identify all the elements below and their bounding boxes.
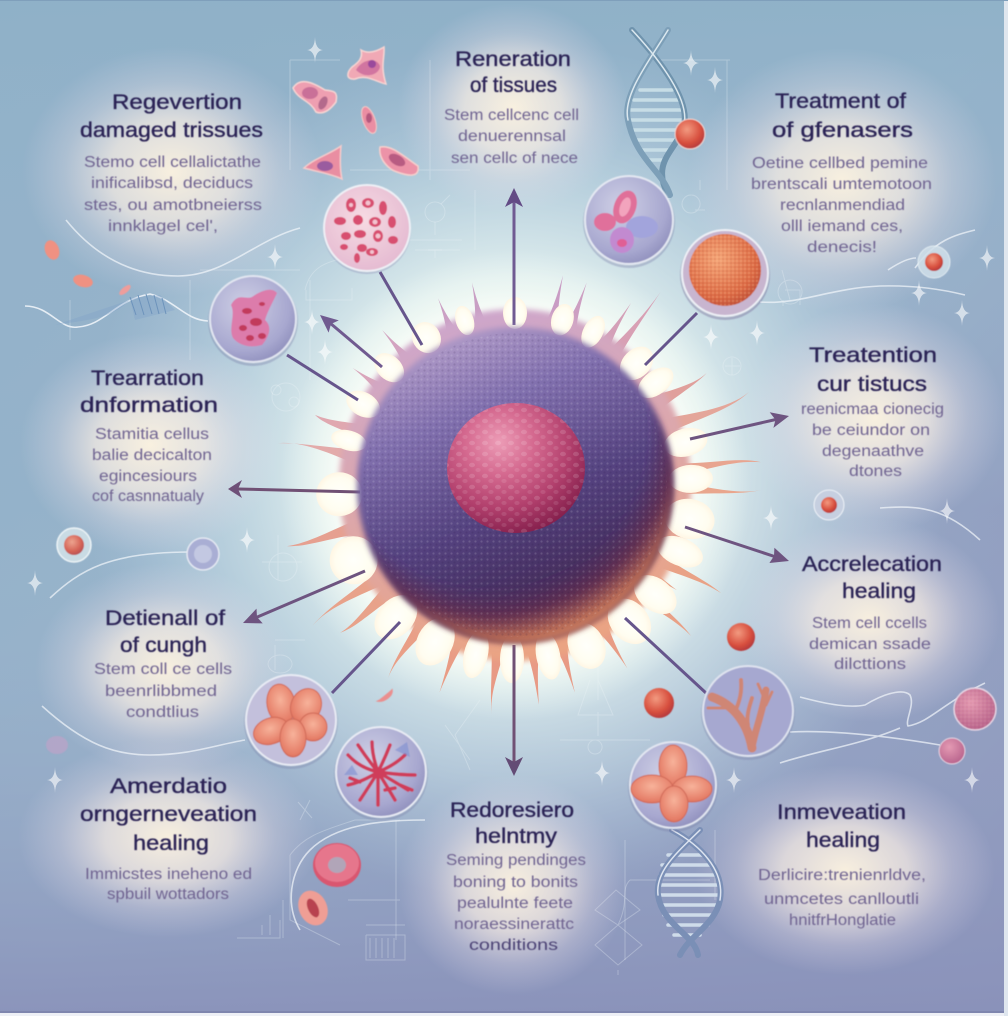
body <box>84 154 262 235</box>
text block: Amerdatio orngerneveation healing <box>80 775 257 903</box>
body <box>758 867 926 929</box>
heading <box>105 607 225 657</box>
body: cof casnnatualy <box>92 488 204 505</box>
connecting thin curves <box>42 220 985 930</box>
heading <box>772 90 913 142</box>
body <box>751 155 932 256</box>
arrow: right upper <box>690 412 789 439</box>
body <box>94 661 232 721</box>
body <box>92 426 212 505</box>
body: Stem cell ccells <box>812 615 927 632</box>
text block: Treatention cur tistucs <box>801 344 944 480</box>
body: egincesiours <box>99 468 197 485</box>
heading: Accrelecation <box>802 553 942 576</box>
arrow: up to tissue regeneration <box>505 188 523 325</box>
small blood cells, left <box>42 238 132 297</box>
heading: Treatention <box>809 344 937 367</box>
body: sen cellc of nece <box>451 150 578 167</box>
bubble: coral branching tissue <box>701 666 795 760</box>
connector lines to bubbles <box>287 272 706 693</box>
arrow: left <box>228 480 360 498</box>
arrow: down <box>505 645 523 776</box>
body: beenrlibbmed <box>105 683 217 700</box>
body: Seming pendinges <box>446 852 586 869</box>
bubble: red filaments <box>334 727 428 821</box>
bubble: four petals <box>628 742 718 832</box>
nucleus <box>447 403 585 533</box>
text block: Accrelecation healing <box>802 553 942 673</box>
body: denecis! <box>807 239 877 256</box>
small DNA strand at left <box>25 294 208 327</box>
small cell bubbles <box>46 119 996 764</box>
heading: healing <box>842 580 916 603</box>
halo petals <box>315 297 718 683</box>
body: denuerennsal <box>458 128 566 145</box>
arrow: upper left <box>320 315 382 367</box>
cell spikes <box>276 273 764 716</box>
body: dtones <box>849 463 902 480</box>
body: reenicmaa cionecig <box>801 401 944 418</box>
body <box>446 852 586 954</box>
body <box>444 107 579 167</box>
heading: of gfenasers <box>772 119 913 142</box>
body: hnitfrHonglatie <box>789 912 896 929</box>
body: degenaathve <box>822 443 924 460</box>
heading <box>80 367 218 417</box>
heading <box>809 344 937 396</box>
body: recnlanmendiad <box>780 197 905 214</box>
arrow: lower left <box>243 571 365 623</box>
body: spbuil wottadors <box>107 886 229 903</box>
body: innklagel cel', <box>108 218 218 235</box>
text block: Inmeveation healing <box>758 801 926 929</box>
heading <box>80 91 263 142</box>
heading <box>450 799 574 848</box>
heading: Reneration <box>455 48 571 71</box>
body: brentscali umtemotoon <box>751 176 932 193</box>
body: Immicstes ineheno ed <box>85 866 252 883</box>
body: Stemo cell cellalictathe <box>84 154 261 171</box>
heading: cur tistucs <box>817 373 927 396</box>
bubble: purple with lobed cells <box>583 176 675 268</box>
heading: helntmy <box>475 825 558 848</box>
body: Stem cellcenc cell <box>444 107 579 124</box>
blood cells bottom left <box>293 843 361 930</box>
DNA helix bottom <box>658 830 721 955</box>
text block: Redoresiero helntmy <box>446 799 586 954</box>
heading: Detienall of <box>105 607 225 630</box>
body: balie decicalton <box>92 447 212 464</box>
heading: orngerneveation <box>80 803 257 826</box>
body: Stem coll ce cells <box>94 661 232 678</box>
heading: Treatment of <box>775 90 906 113</box>
heading: of cungh <box>120 634 207 657</box>
heading: healing <box>133 832 209 855</box>
heading <box>802 553 942 603</box>
body <box>809 615 931 673</box>
heading <box>455 48 571 97</box>
bubble: purple with pink blob <box>208 276 298 366</box>
DNA helix top <box>627 30 685 195</box>
body: condtlius <box>126 704 199 721</box>
body: be ceiundor on <box>812 422 930 439</box>
heading: Amerdatio <box>110 775 227 798</box>
body: noraessinerattc <box>454 916 574 933</box>
text block: Reneration of tissues <box>444 48 579 167</box>
flare ring behind the petals <box>339 309 691 661</box>
heading: Trearration <box>91 367 204 390</box>
body: pealulnte feete <box>457 895 573 912</box>
heading <box>777 801 906 852</box>
text block: Trearration dnformation <box>80 367 218 505</box>
arrow: right lower <box>685 527 789 563</box>
text block: Regevertion damaged tissues <box>80 91 263 235</box>
cell body <box>357 327 673 643</box>
heading: damaged trissues <box>80 119 263 142</box>
body <box>801 401 944 480</box>
text block: Detienall of cungh <box>94 607 232 721</box>
heading: Redoresiero <box>450 799 574 822</box>
body: unmcetes canlloutli <box>764 891 919 908</box>
body: Oetine cellbed pemine <box>752 155 928 172</box>
body: demican ssade <box>809 636 931 653</box>
floating cells, top left <box>293 47 418 179</box>
body: Stamitia cellus <box>95 426 209 443</box>
heading: healing <box>806 829 880 852</box>
bubble: coral flower <box>244 675 338 769</box>
body <box>85 866 252 903</box>
body: olll iemand ces, <box>781 218 903 235</box>
heading: Inmeveation <box>777 801 906 824</box>
heading: of tissues <box>470 74 557 97</box>
body: inificalibsd, deciducs <box>91 175 253 192</box>
body: Derlicire:trenienrldve, <box>758 867 926 884</box>
body: dilcttions <box>834 656 906 673</box>
heading <box>80 775 257 855</box>
body: stes, ou amotbneierss <box>84 197 262 214</box>
body: boning to bonits <box>453 874 578 891</box>
body: conditions <box>469 937 558 954</box>
heading: dnformation <box>80 394 218 417</box>
bubble: orange textured cell <box>680 230 770 320</box>
bubble: pink tissue <box>323 185 411 274</box>
central stem cell <box>228 188 789 776</box>
heading: Regevertion <box>112 91 242 114</box>
text block: Treatment of <box>751 90 932 256</box>
